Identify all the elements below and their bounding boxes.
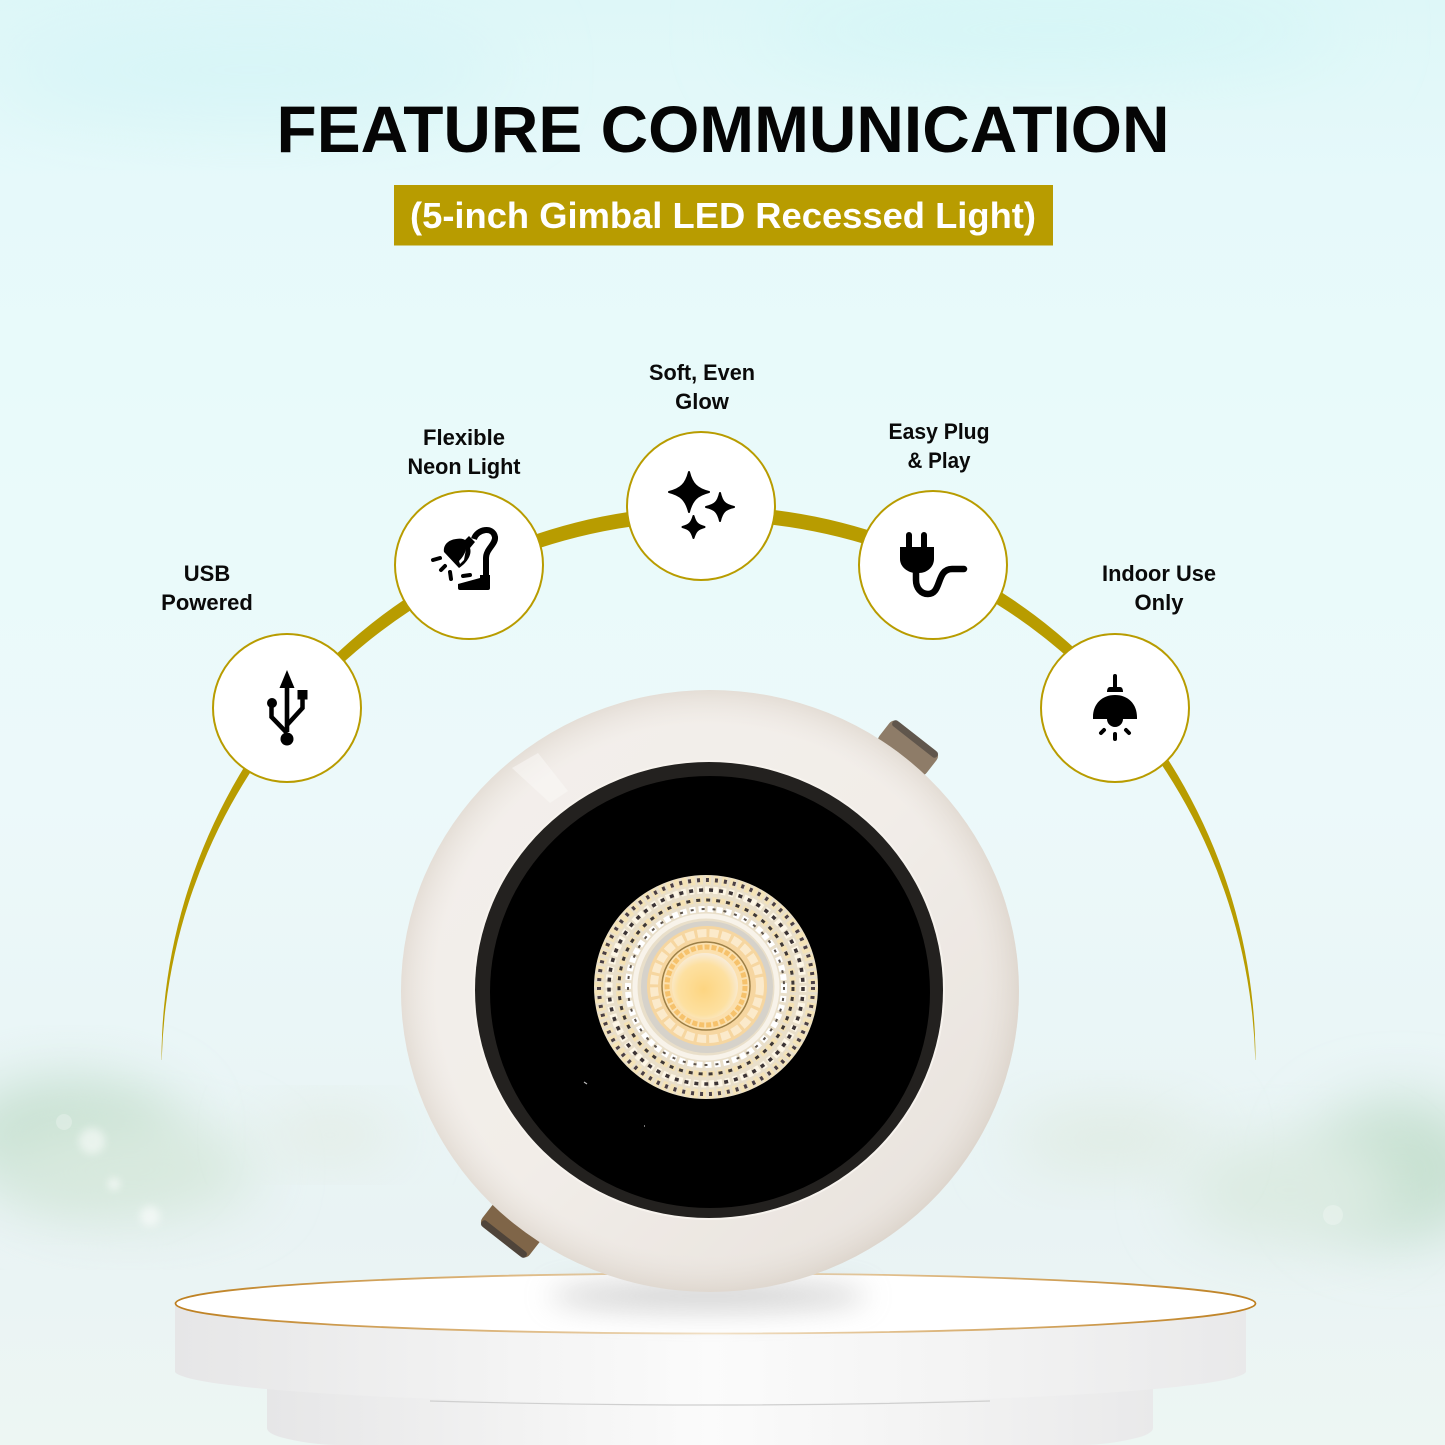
circle: ceiling lamp [1041,634,1189,782]
product shadow [548,1281,868,1311]
platform podium [175,1274,1256,1445]
label: flexible neon light: Flexible [423,425,505,450]
label: indoor use only: Indoor Use [1102,561,1216,586]
lower tier [267,1385,1153,1445]
LED reflector lens [594,875,818,1099]
label: USB powered: USB [184,561,230,586]
label: easy plug and play: & Play [908,448,971,473]
label: easy plug and play: Easy Plug [888,419,990,444]
circle: lamp [395,491,543,639]
label: USB powered: Powered [161,590,253,615]
feature: indoor use only [1041,561,1216,782]
product: recessed light [401,690,1019,1292]
circle: USB [213,634,361,782]
icon: USB symbol [267,670,308,746]
golden arc [162,506,1256,1060]
label: indoor use only: Only [1135,590,1184,615]
circle: sparkles [627,432,775,580]
mounting tab bottom left [478,1200,544,1260]
trim edge shading [401,690,1019,1292]
top surface [176,1274,1256,1334]
mounting tab top right [875,718,941,778]
upper tier [175,1303,1246,1404]
title: FEATURE COMMUNICATION [276,92,1170,166]
specks [584,1082,645,1126]
label: soft even glow: Soft, Even [649,360,755,385]
circle: plug [859,491,1007,639]
feature: USB powered [161,561,361,782]
black interior [490,776,930,1208]
white trim ring [401,690,1019,1292]
feature: soft even glow [627,360,775,580]
icon: ceiling lamp [1093,674,1137,739]
icon: plug [900,532,964,594]
trim highlight [512,753,568,803]
feature: easy plug and play [859,419,1007,639]
bezel [475,762,943,1218]
feature: flexible neon light [395,425,543,639]
label: soft even glow: Glow [675,389,730,414]
subtitle banner: (5-inch Gimbal LED Recessed Light) [410,195,1036,236]
label: flexible neon light: Neon Light [408,454,521,479]
icon: desk lamp [433,530,495,590]
icon: sparkles [669,472,734,538]
trim edge [473,760,945,1220]
subtitle banner [394,185,1053,246]
under shadow [430,1401,990,1405]
